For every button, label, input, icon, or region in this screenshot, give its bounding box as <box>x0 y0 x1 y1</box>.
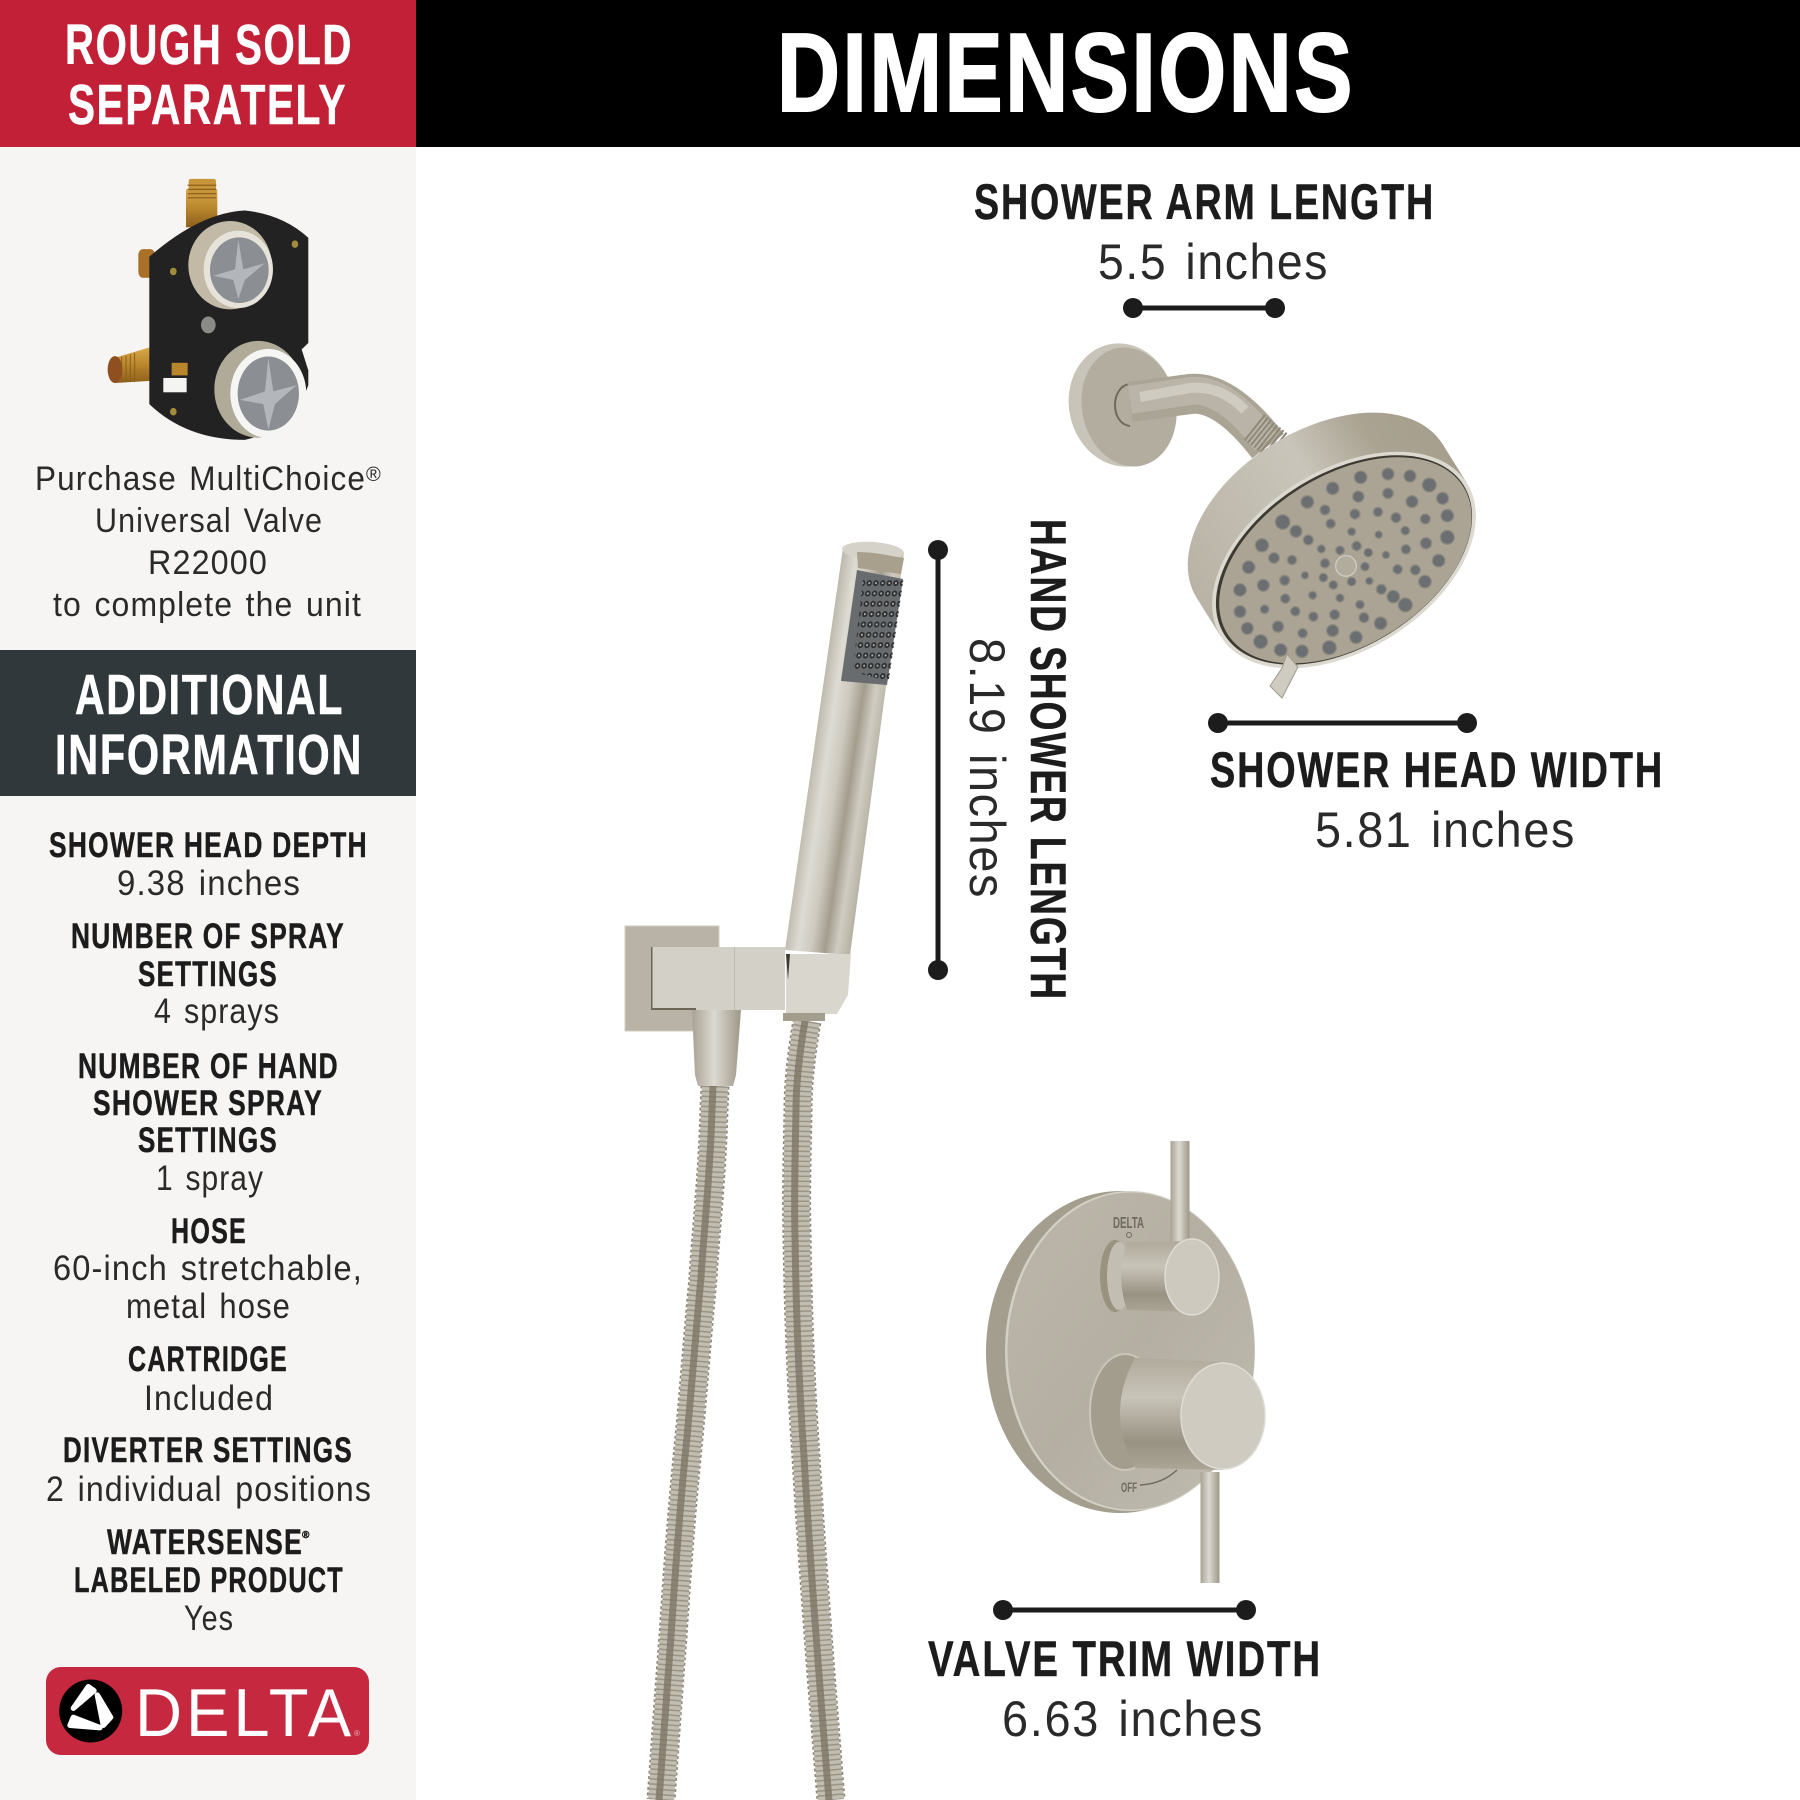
heading: additional information: ADDITIONAL <box>75 663 344 727</box>
dimension: hand shower length: 8.19 inches <box>959 638 1015 899</box>
spec: diverter settings <box>46 1431 372 1509</box>
dimension: shower head width: SHOWER HEAD WIDTH <box>1210 742 1664 798</box>
header: dimensions band <box>416 0 1800 147</box>
spec: hose: metal hose <box>126 1287 291 1326</box>
spec: number of hand shower spray settings: SETTINGS <box>138 1121 278 1160</box>
lower lever <box>1200 1472 1220 1583</box>
lower knob <box>1090 1354 1265 1470</box>
illustration: shower head and arm <box>1057 333 1515 713</box>
handle top cap <box>841 540 905 574</box>
spec: number of spray settings: NUMBER OF SPRAY <box>71 917 345 956</box>
spray face <box>841 570 903 685</box>
spec: number of hand shower spray settings: SHOWER SPRAY <box>93 1084 323 1123</box>
handle <box>785 548 904 955</box>
spec: watersense labeled product: ® <box>302 1530 310 1541</box>
text block: purchase valve note: Purchase MultiChoice <box>35 460 366 498</box>
spec: diverter settings: 2 individual positions <box>46 1470 372 1509</box>
hose: left <box>659 1086 715 1800</box>
spec: number of hand shower spray settings: NUMBER OF HAND <box>78 1047 339 1086</box>
illustration: hand shower <box>625 540 905 1800</box>
dimension: valve trim width <box>928 1600 1322 1747</box>
spec: shower head depth: SHOWER HEAD DEPTH <box>49 826 368 865</box>
arrow: shower head measure <box>1208 713 1477 733</box>
spec: hose <box>53 1212 363 1326</box>
dimension: shower arm length: SHOWER ARM LENGTH <box>974 174 1435 230</box>
banner: rough sold separately: ROUGH SOLD <box>65 13 353 77</box>
dimension: valve trim width: VALVE TRIM WIDTH <box>928 1631 1322 1687</box>
holder bracket <box>651 947 851 1021</box>
spray nozzles <box>1234 468 1454 658</box>
spec: watersense labeled product: Yes <box>184 1599 234 1638</box>
heading: additional information <box>0 650 416 796</box>
dimension: hand shower length <box>928 519 1076 1001</box>
engraved marks <box>1113 1215 1177 1495</box>
banner: rough sold separately: SEPARATELY <box>68 73 347 137</box>
spec: cartridge: Included <box>144 1379 274 1418</box>
dimension: shower arm length <box>974 174 1435 318</box>
dimension: hand shower length: HAND SHOWER LENGTH <box>1020 519 1076 1001</box>
spec: hose: 60-inch stretchable, <box>53 1249 363 1288</box>
logo: Delta: ® <box>354 1729 360 1738</box>
spec: shower head depth: 9.38 inches <box>117 864 301 903</box>
spec: cartridge <box>128 1340 288 1418</box>
dimension: shower arm length: 5.5 inches <box>1098 234 1329 290</box>
spec: shower head depth <box>49 826 368 903</box>
text block: purchase valve note: ® <box>366 464 381 486</box>
engraved marks: OFF <box>1121 1479 1137 1495</box>
spray selector lever <box>1270 654 1298 698</box>
spec: watersense labeled product: WATERSENSE <box>107 1523 303 1562</box>
outlet cone <box>692 1010 741 1086</box>
spec: diverter settings: DIVERTER SETTINGS <box>63 1431 353 1470</box>
wall flange <box>1057 333 1187 477</box>
text block: purchase valve note: to complete the unit <box>53 586 362 624</box>
upper lever <box>1170 1141 1190 1241</box>
text block: purchase valve note: R22000 <box>148 544 268 582</box>
spec: number of hand shower spray settings <box>78 1047 339 1198</box>
arrow: hand shower measure <box>928 540 948 980</box>
dimension: shower head width <box>1208 713 1664 858</box>
engraved marks: DELTA <box>1113 1215 1144 1232</box>
wall mount plate <box>625 926 719 1031</box>
banner: rough sold separately <box>0 0 416 147</box>
spec: hose: HOSE <box>171 1212 247 1251</box>
spec: cartridge: CARTRIDGE <box>128 1340 288 1379</box>
arrow: valve trim measure <box>993 1600 1256 1620</box>
logo: Delta <box>46 1667 369 1755</box>
hose: right <box>795 1021 831 1800</box>
panel: sidebar <box>0 0 416 1800</box>
arrow: shower arm measure <box>1123 298 1285 318</box>
icon: MultiChoice universal valve <box>108 179 308 440</box>
upper knob <box>1100 1239 1219 1315</box>
spec: number of spray settings: SETTINGS <box>138 955 278 994</box>
spec: watersense labeled product: LABELED PRODUCT <box>74 1561 344 1600</box>
escutcheon plate <box>986 1191 1255 1513</box>
heading: additional information: INFORMATION <box>55 723 363 787</box>
shower head body <box>1149 368 1515 713</box>
text block: purchase valve note <box>35 460 381 624</box>
dimension: valve trim width: 6.63 inches <box>1002 1691 1264 1747</box>
dimension: shower head width: 5.81 inches <box>1315 802 1576 858</box>
spec: number of spray settings <box>71 917 345 1031</box>
text block: purchase valve note: Universal Valve <box>95 502 323 540</box>
logo: Delta: DELTA <box>135 1675 355 1751</box>
shower arm <box>1130 388 1284 451</box>
title: DIMENSIONS <box>777 11 1355 135</box>
spec: watersense labeled product <box>74 1523 344 1638</box>
spec: number of spray settings: 4 sprays <box>154 992 280 1031</box>
spec: number of hand shower spray settings: 1 spray <box>156 1159 264 1198</box>
illustration: valve trim <box>986 1141 1265 1583</box>
